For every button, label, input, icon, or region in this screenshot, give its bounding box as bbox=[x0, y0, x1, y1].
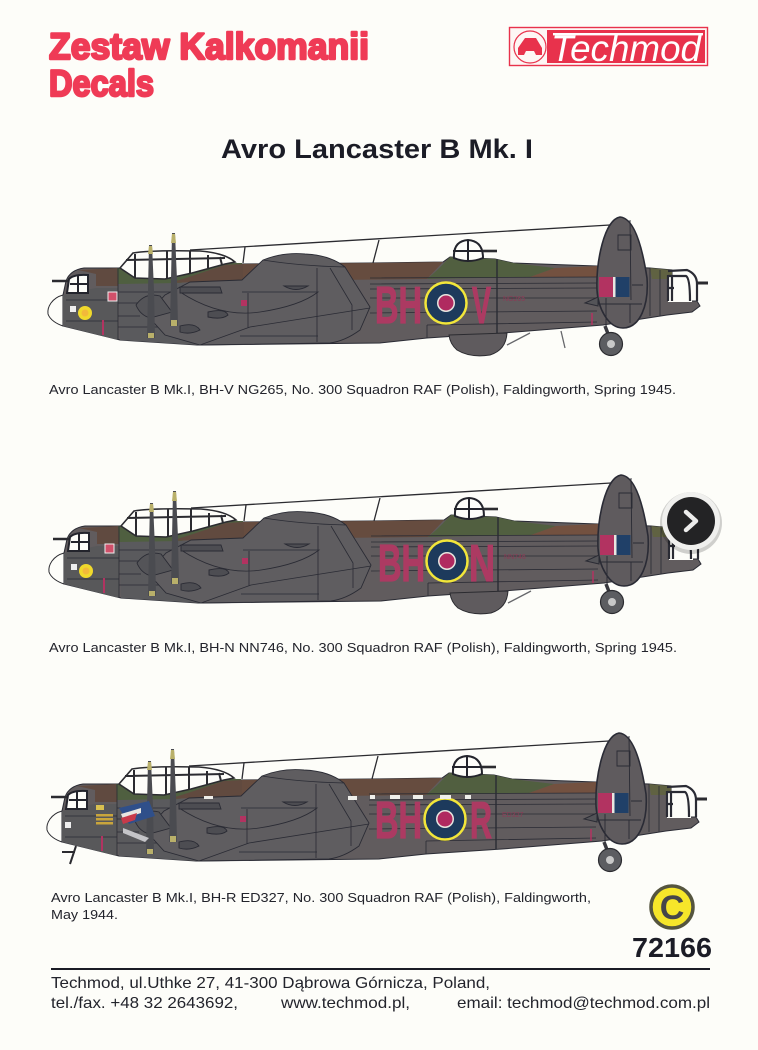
code letters: BH bbox=[375, 277, 422, 335]
caption 2: Avro Lancaster B Mk.I, BH-N NN746, No. 300 Squadron RAF (Polish), Faldingworth, Spring 1945. bbox=[49, 640, 677, 655]
code letters: R bbox=[470, 792, 492, 850]
nose marking bbox=[78, 306, 92, 320]
serial: NN746 bbox=[504, 554, 526, 561]
code letters: V bbox=[472, 277, 491, 335]
logo wordmark: Techmod bbox=[551, 28, 702, 69]
caption 3: May 1944. bbox=[51, 907, 118, 922]
serial: ED327 bbox=[502, 812, 524, 819]
footer rule bbox=[51, 968, 710, 970]
caption 1: Avro Lancaster B Mk.I, BH-V NG265, No. 300 Squadron RAF (Polish), Faldingworth, Spring 1945. bbox=[49, 382, 676, 397]
heading: decals: Zestaw Kalkomanii bbox=[49, 26, 369, 67]
radome bulge bbox=[449, 333, 507, 356]
polish insignia bbox=[108, 292, 117, 301]
white nose square bbox=[65, 822, 71, 828]
bomb tally bars bbox=[204, 795, 471, 800]
ventral gun bbox=[62, 846, 76, 864]
code letters bbox=[378, 535, 495, 593]
serial: NG265 bbox=[503, 296, 525, 303]
product number: 72166 bbox=[632, 932, 712, 963]
footer contact: www.techmod.pl, bbox=[280, 995, 410, 1012]
code letters: BH bbox=[378, 535, 425, 593]
carousel next button bbox=[660, 492, 722, 554]
aircraft 3: BH-R bbox=[47, 733, 707, 872]
heading: decals: Decals bbox=[49, 63, 154, 104]
radome bulge bbox=[450, 591, 508, 614]
aircraft 1: BH-V bbox=[48, 217, 708, 356]
badge: C: C bbox=[660, 889, 684, 927]
title: Avro Lancaster B Mk. I bbox=[221, 134, 533, 164]
aircraft 2: BH-N bbox=[49, 475, 709, 614]
logo roundel icon bbox=[514, 31, 546, 63]
badge: C bbox=[651, 886, 693, 928]
code letters bbox=[375, 792, 492, 850]
heading: decals bbox=[49, 26, 369, 104]
nose art bbox=[96, 801, 155, 842]
footer contact: tel./fax. +48 32 2643692, bbox=[51, 995, 238, 1012]
polish insignia bbox=[105, 544, 114, 553]
footer contact: email: techmod@techmod.com.pl bbox=[457, 995, 710, 1012]
caption 3 bbox=[51, 890, 591, 922]
chevron arrow bbox=[686, 512, 696, 530]
footer contact: Techmod, ul.Uthke 27, 41-300 Dąbrowa Górnicza, Poland, bbox=[51, 975, 490, 992]
footer contact bbox=[51, 975, 710, 1012]
logo: Techmod bbox=[510, 28, 708, 69]
code letters: BH bbox=[375, 792, 422, 850]
code letters: N bbox=[469, 535, 495, 593]
code letters bbox=[375, 277, 491, 335]
nose marking bbox=[79, 564, 93, 578]
caption 3: Avro Lancaster B Mk.I, BH-R ED327, No. 300 Squadron RAF (Polish), Faldingworth, bbox=[51, 890, 591, 905]
